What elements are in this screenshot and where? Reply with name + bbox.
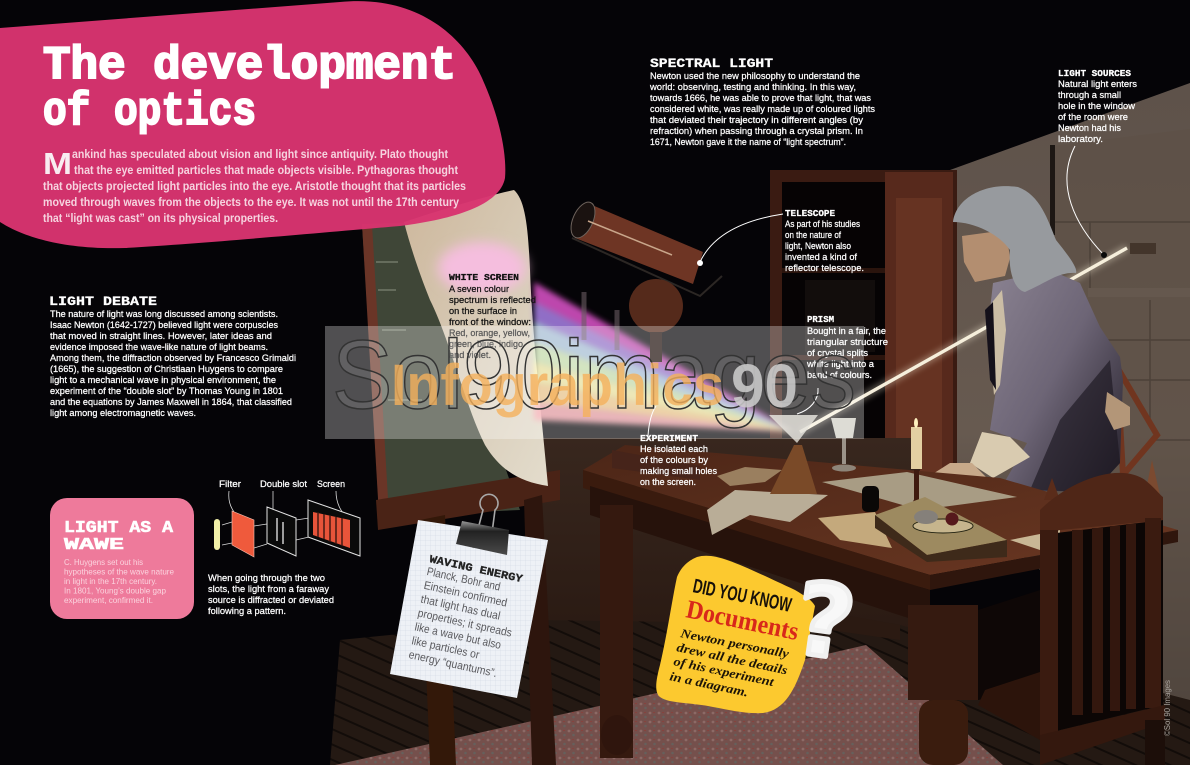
paper sheets <box>707 490 1060 550</box>
text block: light debate: light among electromagnetic waves. <box>50 408 196 419</box>
text block: light sources: laboratory. <box>1058 134 1103 145</box>
panel: light as a wawe: WAWE <box>64 536 124 555</box>
text block: light debate: and the equations by James Maxwell in 1864, that classified <box>50 397 292 408</box>
note text: that light has dual <box>420 594 501 623</box>
globe and stand <box>629 279 683 362</box>
panel: light as a wawe: C. Huygens set out his <box>64 557 143 567</box>
title panel: pink blob <box>0 1 505 248</box>
panel: light as a wawe <box>50 498 194 619</box>
text block: white screen: green, blue, indigo <box>449 339 523 350</box>
text block: prism: white light into a <box>806 359 875 370</box>
telescope <box>566 199 722 296</box>
text block: light debate: evidence imposed the wave-like nature of light beams. <box>50 342 268 353</box>
question mark: ? <box>788 560 862 683</box>
floor planks <box>330 620 1190 765</box>
documents text <box>668 626 791 700</box>
text block: spectral light: that deviated their trajectory in different angles (by <box>650 115 863 126</box>
intro text: that “light was cast” on its physical properties. <box>43 212 278 225</box>
watermark band: 90 <box>731 352 798 420</box>
leader: prism <box>797 388 818 414</box>
text block: prism: PRISM <box>807 314 834 325</box>
text block: spectral light: SPECTRAL LIGHT <box>650 56 773 71</box>
room wall <box>950 83 1190 720</box>
intro text <box>43 146 466 225</box>
coat <box>990 270 1123 492</box>
panel: light as a wawe: hypotheses of the wave nature <box>64 566 174 576</box>
text block: light debate: that moved in straight lines. However, later ideas and <box>50 331 272 342</box>
text block: telescope: TELESCOPE <box>785 208 835 219</box>
text block: experiment: of the colours by <box>640 455 708 466</box>
text block: light debate: The nature of light was long discussed among scientists. <box>50 309 278 320</box>
text block: telescope: reflector telescope. <box>785 263 864 274</box>
text block: spectral light: refraction) when passing through a crystal prism. In <box>650 126 863 137</box>
note text: like a wave but also <box>413 621 502 652</box>
copyright credit: ©Sol 90 Images <box>1163 680 1172 736</box>
face <box>962 230 1010 282</box>
colour swatches <box>717 467 782 486</box>
text block: spectral light: Newton used the new philosophy to understand the <box>650 71 860 82</box>
inkwell <box>862 486 879 512</box>
white screen curtain <box>404 190 548 486</box>
text block: telescope: invented a kind of <box>785 252 857 263</box>
text block: light debate: experiment of the “double slot” by Thomas Young in 1801 <box>50 386 283 397</box>
candle <box>907 418 925 512</box>
text block: experiment: making small holes <box>640 466 717 477</box>
text block: spectral light: towards 1666, he was able to prove that light, that was <box>650 93 871 104</box>
text block: light sources: through a small <box>1058 90 1121 101</box>
text block: light debate: Isaac Newton (1642-1727) believed light were corpuscles <box>50 320 278 331</box>
leader: light sources <box>1067 146 1107 258</box>
text block: prism: triangular structure <box>807 337 888 348</box>
text block: spectral light: world: observing, testing and thinking. In this way, <box>649 82 856 93</box>
window hole <box>1130 243 1156 254</box>
text block: prism: band of colours. <box>807 370 872 381</box>
text block: experiment <box>640 433 717 488</box>
watermark band: Sol90images <box>332 320 856 429</box>
text block: light sources <box>1058 68 1137 145</box>
intro text: that objects projected light particles into the eye. Aristotle thought that its particles <box>43 180 466 193</box>
Isaac Newton figure <box>920 186 1157 497</box>
text block: prism: of crystal splits <box>807 348 868 359</box>
text block: light sources: LIGHT SOURCES <box>1058 68 1131 79</box>
text block: white screen: A seven colour <box>449 284 510 295</box>
double slot plate <box>267 507 296 556</box>
set square <box>1117 367 1157 475</box>
text block: white screen: WHITE SCREEN <box>449 272 519 283</box>
text block: prism: Bought in a fair, the <box>807 326 886 337</box>
text block: light sources: of the room were <box>1058 112 1128 123</box>
text block: light sources: hole in the window <box>1058 101 1135 112</box>
title: of optics <box>43 86 256 138</box>
leader: telescope <box>697 214 783 266</box>
text block: white screen <box>449 272 536 361</box>
chair <box>978 460 1165 765</box>
diagram caption: source is diffracted or deviated <box>208 595 334 606</box>
panel: light as a wawe: experiment, confirmed it. <box>64 595 153 605</box>
lamp <box>214 519 220 550</box>
intro text: that the eye emitted particles that made objects visible. Pythagoras thought <box>74 164 458 177</box>
text block: light debate: light to a mechanical wave in physical environment, the <box>50 375 276 386</box>
intro text: ankind has speculated about vision and light since antiquity. Plato thought <box>72 148 448 161</box>
chalkboard on easel <box>362 222 560 765</box>
text block: prism <box>806 314 888 381</box>
text block: experiment: on the screen. <box>640 477 696 488</box>
intro text: moved through waves from the objects to the eye. It was not until the 17th century <box>43 196 460 209</box>
text block: light debate: (1665), the suggestion of Christiaan Huygens to compare <box>50 364 283 375</box>
diagram caption: slots, the light from a faraway <box>208 584 329 595</box>
diagram caption <box>208 573 334 617</box>
title: The development <box>43 40 456 92</box>
open notebook <box>822 472 1017 510</box>
diagram: double slot experiment <box>214 479 360 557</box>
panel: light as a wawe: LIGHT AS A <box>64 519 174 538</box>
did you know heading: DID YOU KNOW <box>691 575 793 617</box>
diagram caption: When going through the two <box>208 573 325 584</box>
text block: light sources: Natural light enters <box>1058 79 1137 90</box>
binder clip <box>456 494 509 555</box>
documents heading: Documents <box>684 594 801 646</box>
note text: like particles or <box>410 635 481 662</box>
back panelling under table <box>540 438 920 635</box>
documents text: of his experiment <box>672 654 776 689</box>
callout: did you know <box>656 556 862 713</box>
large book with plate and wax seal <box>875 497 1007 562</box>
text block: spectral light: 1671, Newton gave it the name of “light spectrum”. <box>650 137 846 148</box>
text block: light debate: Among them, the diffraction observed by Francesco Grimaldi <box>50 353 296 364</box>
rainbow light spectrum <box>534 282 795 432</box>
note text: energy “quantums”. <box>407 649 498 680</box>
note text: Einstein confirmed <box>423 580 508 610</box>
text block: telescope: As part of his studies <box>785 219 860 230</box>
bookshelf <box>770 170 957 490</box>
screen with fringes <box>308 500 360 556</box>
light ray from window <box>800 248 1127 432</box>
book stack <box>612 450 700 480</box>
cuff <box>970 432 1030 478</box>
text block: light debate: LIGHT DEBATE <box>49 294 157 309</box>
desk <box>583 445 1178 765</box>
intro text: M <box>43 146 72 181</box>
label: filter: Filter <box>219 479 242 490</box>
text block: spectral light: considered white, was really made up of coloured lights <box>650 104 875 115</box>
text block: white screen: front of the window: <box>449 317 531 328</box>
text block: white screen: and violet. <box>449 350 491 361</box>
goblet <box>831 418 856 472</box>
note card: waving energy <box>390 494 548 698</box>
diagram caption: following a pattern. <box>208 606 286 617</box>
text block: spectral light <box>649 56 875 148</box>
note text: Planck, Bohr and <box>426 566 501 594</box>
note text: properties; it spreads <box>417 608 513 640</box>
panel: light as a wawe: In 1801, Young’s double gap <box>64 586 166 596</box>
back hand <box>1105 392 1130 430</box>
text block: light debate <box>49 294 296 419</box>
documents text: drew all the details <box>675 640 789 677</box>
illustration: Newton's laboratory scene <box>330 83 1190 765</box>
rug <box>335 645 1003 765</box>
label: double slot: Double slot <box>260 479 307 490</box>
documents text: Newton personally <box>678 626 791 661</box>
note text: WAVING ENERGY <box>428 554 524 586</box>
text block: telescope: on the nature of <box>785 230 841 241</box>
panel: light as a wawe: in light in the 17th century. <box>64 576 157 586</box>
label: screen: Screen <box>317 479 345 490</box>
text block: experiment: EXPERIMENT <box>640 433 698 444</box>
leader: experiment <box>648 406 656 436</box>
title <box>43 40 456 138</box>
filter plate <box>232 511 254 557</box>
text block: telescope: light, Newton also <box>785 241 851 252</box>
documents text: in a diagram. <box>668 669 750 700</box>
watermark band: Infographics <box>391 353 724 418</box>
text block: light sources: Newton had his <box>1058 123 1121 134</box>
note text <box>407 554 525 681</box>
prism on stand <box>769 415 818 494</box>
hand <box>920 463 987 497</box>
text block: white screen: Red, orange, yellow, <box>449 328 530 339</box>
glass tubes <box>584 292 617 350</box>
text block: experiment: He isolated each <box>640 444 708 455</box>
wig <box>953 186 1076 292</box>
text block: white screen: on the surface in <box>449 306 517 317</box>
text block: white screen: spectrum is reflected <box>449 295 536 306</box>
text block: telescope <box>785 208 864 274</box>
